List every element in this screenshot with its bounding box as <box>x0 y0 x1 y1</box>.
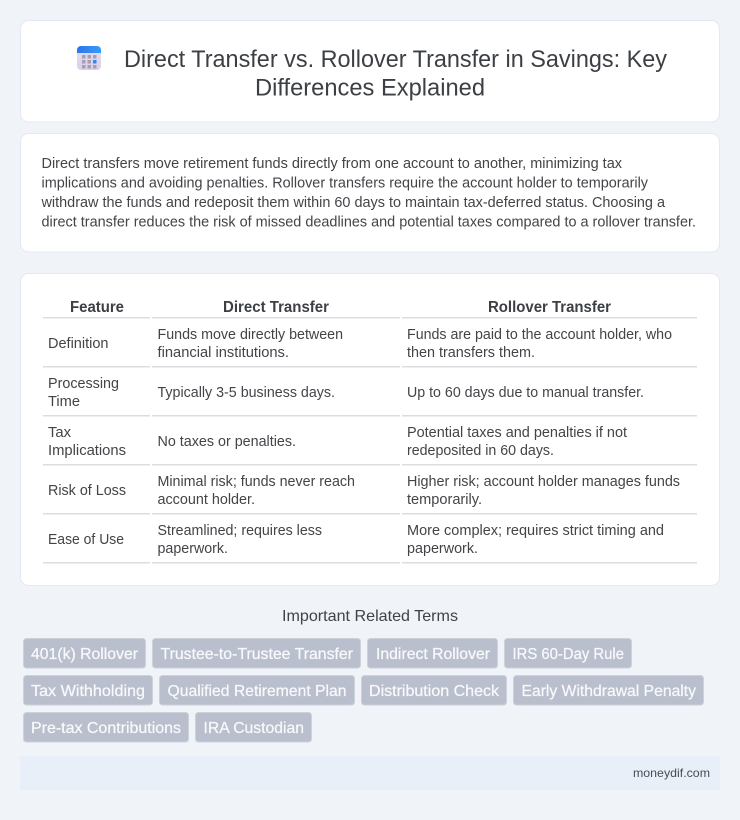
text block: intro: implications and avoiding penalties. Rollover transfers require the account holder to temporarily <box>42 176 649 192</box>
tag: Distribution Check <box>369 683 500 700</box>
footer <box>20 756 720 790</box>
row: ease of use <box>48 523 664 557</box>
row: definition: Definition <box>48 336 108 352</box>
tag <box>514 676 704 705</box>
row: processing time: Typically 3-5 business days. <box>158 385 335 401</box>
tag <box>504 638 632 668</box>
table header <box>70 299 611 316</box>
tag: IRS 60-Day Rule <box>512 646 624 663</box>
tag: Pre-tax Contributions <box>31 720 181 737</box>
row: definition: Funds move directly between <box>158 327 343 343</box>
row: risk of loss: Risk of Loss <box>48 483 126 499</box>
table header: Direct Transfer <box>223 299 329 316</box>
row: processing time: Processing <box>48 376 119 392</box>
tag: Trustee-to-Trustee Transfer <box>160 646 354 663</box>
row: tax implications: redeposited in 60 days. <box>407 443 554 459</box>
tag: 401(k) Rollover <box>31 646 139 663</box>
row: definition <box>48 327 672 361</box>
tag <box>368 638 498 668</box>
row: risk of loss: Higher risk; account holder manages funds <box>407 474 680 490</box>
title <box>124 46 667 102</box>
tag <box>362 676 506 705</box>
row: ease of use: Ease of Use <box>48 532 124 548</box>
row: processing time <box>48 376 644 410</box>
row: ease of use: paperwork. <box>158 541 228 557</box>
row: ease of use: Streamlined; requires less <box>158 523 322 539</box>
row: definition: financial institutions. <box>158 345 289 361</box>
panel: comparison table <box>20 274 720 586</box>
row: ease of use: paperwork. <box>407 541 478 557</box>
table header: Rollover Transfer <box>488 299 611 316</box>
tag list: related terms <box>24 638 704 742</box>
tag: Indirect Rollover <box>376 646 491 663</box>
row: definition: then transfers them. <box>407 345 535 361</box>
footer: moneydif.com <box>633 766 710 780</box>
row: tax implications: Implications <box>48 443 126 459</box>
row: processing time: Time <box>48 394 80 410</box>
text block: intro <box>40 156 696 230</box>
icon: calendar <box>77 46 101 70</box>
heading: related terms: Important Related Terms <box>282 608 458 625</box>
tag <box>160 676 354 705</box>
tag <box>196 712 312 742</box>
tag <box>24 712 188 742</box>
tag: Tax Withholding <box>31 683 145 700</box>
tag: Qualified Retirement Plan <box>168 683 346 700</box>
row: risk of loss: Minimal risk; funds never reach <box>158 474 355 490</box>
panel: intro paragraph <box>20 134 720 252</box>
row: risk of loss: temporarily. <box>407 492 482 508</box>
row: tax implications: Tax <box>48 425 72 441</box>
tag: Early Withdrawal Penalty <box>522 683 696 700</box>
tag: IRA Custodian <box>204 720 304 737</box>
title: Direct Transfer vs. Rollover Transfer in Savings: Key <box>124 46 667 73</box>
row: risk of loss <box>48 474 680 508</box>
tag <box>24 638 146 668</box>
text block: intro: Direct transfers move retirement funds directly from one account to another, minimizing tax <box>42 156 623 172</box>
title: Differences Explained <box>255 74 485 102</box>
panel: title card <box>20 20 720 122</box>
row: definition: Funds are paid to the account holder, who <box>407 327 672 343</box>
table header: Feature <box>70 299 124 316</box>
tag <box>152 638 360 668</box>
row: tax implications: Potential taxes and penalties if not <box>407 425 627 441</box>
tag <box>24 676 152 705</box>
row: tax implications <box>48 425 627 459</box>
row: risk of loss: account holder. <box>158 492 255 508</box>
row: ease of use: More complex; requires strict timing and <box>407 523 664 539</box>
text block: intro: direct transfer reduces the risk of missed deadlines and potential taxes compared to a rollover transfer. <box>42 214 696 230</box>
row: tax implications: No taxes or penalties. <box>158 434 296 450</box>
text block: intro: withdraw the funds and redeposit them within 60 days to maintain tax-deferred status. Choosing a <box>40 195 665 211</box>
row: processing time: Up to 60 days due to manual transfer. <box>407 385 644 401</box>
